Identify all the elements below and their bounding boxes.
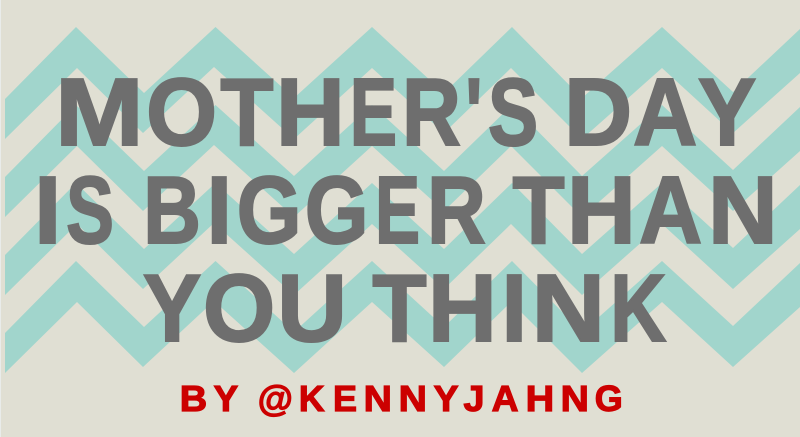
title: M (55, 59, 144, 166)
byline: @ (258, 378, 293, 419)
byline: B (180, 378, 207, 419)
title: K (610, 255, 666, 362)
title: B (143, 157, 201, 264)
title: I (207, 157, 232, 264)
title: G (305, 157, 368, 264)
title: I (34, 157, 61, 264)
title: T (372, 255, 427, 362)
title: A (639, 157, 702, 264)
title: N (708, 157, 778, 264)
title: R (402, 59, 461, 166)
title: O (203, 255, 275, 362)
byline: K (299, 378, 325, 419)
title: D (564, 59, 632, 166)
title: R (427, 157, 486, 264)
chevron background pattern (5, 27, 800, 373)
byline: N (399, 378, 427, 419)
byline: Y (434, 378, 458, 419)
byline: Y (214, 378, 238, 419)
title: T (220, 59, 274, 166)
title: S (488, 59, 538, 166)
title: S (66, 157, 114, 264)
title: ' (465, 59, 482, 166)
title: U (277, 255, 347, 362)
byline: A (492, 378, 518, 419)
byline: N (561, 378, 589, 419)
byline: E (333, 378, 357, 419)
title: H (567, 157, 636, 264)
title: T (512, 157, 565, 264)
byline: N (364, 378, 392, 419)
byline: G (595, 378, 623, 419)
title: E (350, 59, 397, 166)
title: H (276, 59, 345, 166)
title: G (237, 157, 302, 264)
title: O (146, 59, 217, 166)
byline: J (464, 378, 484, 419)
byline: H (526, 378, 554, 419)
title: H (428, 255, 497, 362)
title: A (633, 59, 697, 166)
title: Y (143, 255, 201, 362)
title: Y (698, 59, 756, 166)
title: I (502, 255, 527, 362)
title: N (532, 255, 605, 362)
title (34, 59, 778, 362)
title: E (375, 157, 420, 264)
